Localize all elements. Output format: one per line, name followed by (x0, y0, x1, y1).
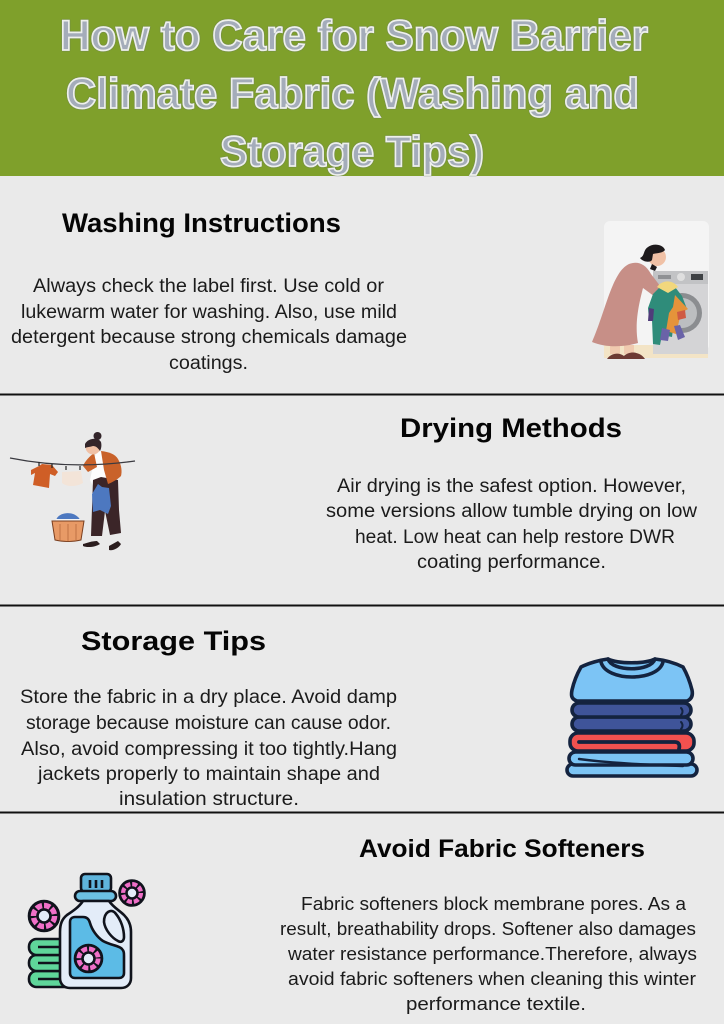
text block: drying methods: heat. Low heat can help restore DWR (355, 527, 675, 548)
text block: avoid fabric softeners: water resistance performance.Therefore, always (287, 944, 697, 964)
text block: washing instructions: coatings. (169, 353, 248, 374)
icon: detergent bottle with flowers (29, 874, 144, 988)
text block: washing instructions: Always check the label first. Use cold or (33, 276, 385, 297)
panel: drying methods (10, 413, 697, 573)
text block: washing instructions (11, 276, 407, 374)
text block: storage tips: Store the fabric in a dry place. Avoid damp (20, 687, 397, 708)
text block: drying methods: some versions allow tumble drying on low (326, 501, 697, 522)
panel: avoid fabric softeners (29, 835, 697, 1014)
heading: drying methods: Drying Methods (400, 413, 622, 443)
heading: washing instructions: Washing Instructions (62, 208, 341, 238)
title: Climate Fabric (Washing and (66, 70, 639, 118)
text block: washing instructions: detergent because strong chemicals damage (11, 327, 407, 348)
title: How to Care for Snow Barrier (60, 12, 648, 60)
heading: storage tips: Storage Tips (81, 626, 266, 656)
text block: storage tips: jackets properly to maintain shape and (37, 764, 380, 785)
text block: avoid fabric softeners: avoid fabric softeners when cleaning this winter (288, 969, 696, 989)
icon: woman loading washing machine (592, 221, 709, 359)
panel: washing instructions (11, 208, 709, 374)
panel: storage tips (20, 626, 697, 810)
text block: storage tips (20, 687, 397, 810)
icon: right flower (120, 880, 144, 906)
icon: stack of folded shirts (567, 659, 697, 776)
text block: avoid fabric softeners: performance textile. (406, 994, 586, 1014)
icon: left flower (29, 901, 59, 931)
text block: drying methods: Air drying is the safest option. However, (337, 476, 686, 497)
text block: washing instructions: lukewarm water for washing. Also, use mild (21, 302, 397, 323)
header banner (0, 0, 724, 176)
title: Storage Tips) (220, 128, 484, 176)
icon: woman hanging laundry (10, 432, 135, 550)
text block: avoid fabric softeners: result, breathability drops. Softener also damages (280, 919, 696, 939)
text block: storage tips: storage because moisture can cause odor. (26, 713, 391, 734)
title (60, 12, 648, 176)
text block: drying methods (326, 476, 697, 573)
icon: bottle flower (75, 945, 102, 972)
text block: storage tips: Also, avoid compressing it too tightly.Hang (21, 739, 397, 760)
text block: drying methods: coating performance. (417, 552, 606, 573)
text block: avoid fabric softeners: Fabric softeners block membrane pores. As a (301, 894, 687, 914)
heading: avoid fabric softeners: Avoid Fabric Softeners (359, 835, 645, 863)
text block: storage tips: insulation structure. (119, 789, 299, 810)
text block: avoid fabric softeners (280, 894, 697, 1014)
